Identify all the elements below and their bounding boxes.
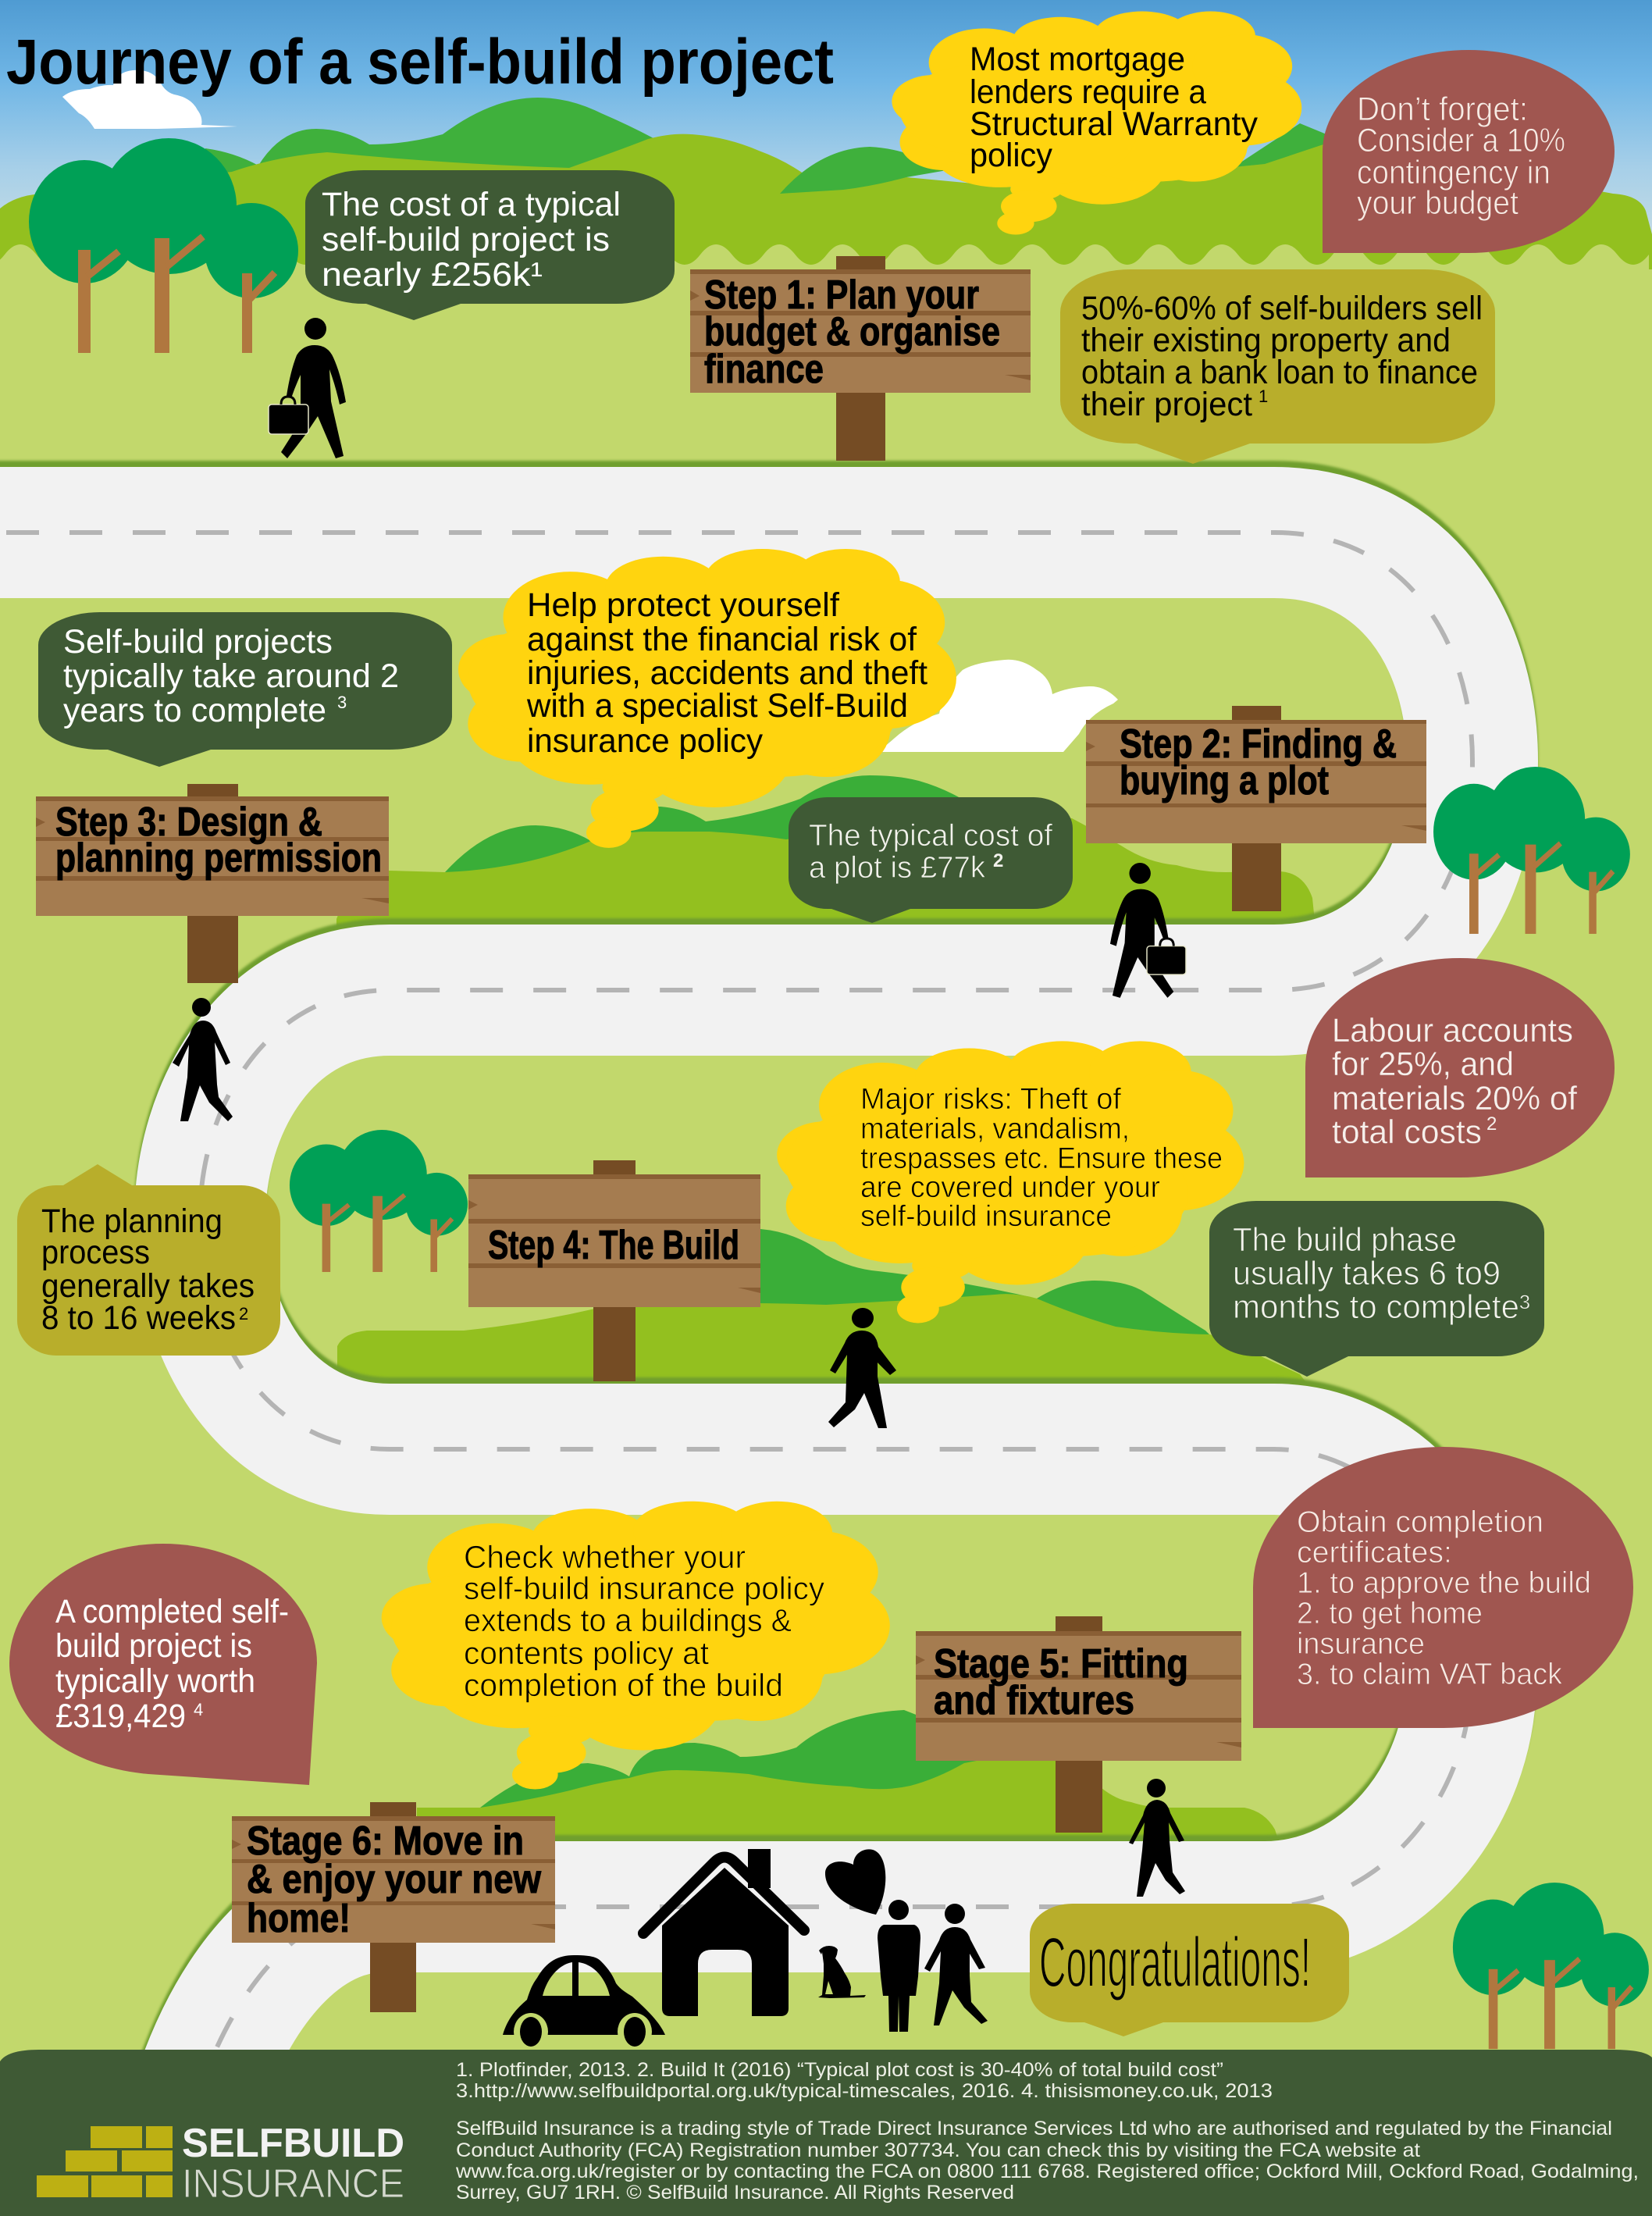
- sign text: [704, 273, 1000, 392]
- bubble text: years to complete: [63, 692, 326, 729]
- footer legal text: Surrey, GU7 1RH. © SelfBuild Insurance. All Rights Reserved: [456, 2182, 1014, 2204]
- icon: heart: [825, 1849, 885, 1915]
- cloud text: self-build insurance: [860, 1200, 1112, 1233]
- bubble text: 2: [1486, 1113, 1497, 1135]
- bubble text: 4: [194, 1700, 203, 1719]
- callout: self-builders finance: [1060, 269, 1495, 464]
- sign text: finance: [704, 347, 824, 392]
- footer legal text: SelfBuild Insurance is a trading style of Trade Direct Insurance Services Ltd who are authorised and regulated by the Financial: [456, 2118, 1612, 2139]
- bubble text: The build phase: [1233, 1221, 1457, 1259]
- bubble text: Consider a 10%: [1357, 122, 1565, 159]
- bubble text: usually takes 6 to9: [1233, 1255, 1501, 1292]
- cloud text: [860, 1083, 1223, 1233]
- callout: completed value: [9, 1544, 317, 1785]
- callout: structural warranty cloud: [892, 12, 1301, 235]
- bubble text: 2: [239, 1304, 248, 1324]
- cloud shape: [458, 549, 956, 848]
- callout: planning weeks: [17, 1164, 280, 1356]
- icon: walker with briefcase, step 2: [1110, 863, 1186, 998]
- icon: car: [503, 1955, 665, 2050]
- sign: step 2: [1086, 706, 1426, 911]
- far hills left: [187, 98, 703, 234]
- bubble text: total costs: [1332, 1113, 1482, 1151]
- callout: build phase: [1209, 1201, 1544, 1377]
- footer references: 3.http://www.selfbuildportal.org.uk/typical-timescales, 2016. 4. thisismoney.co.uk, 2013: [456, 2080, 1273, 2102]
- cloud text: self-build insurance policy: [464, 1570, 824, 1606]
- cloud text: [464, 1539, 824, 1703]
- footer legal text: Conduct Authority (FCA) Registration number 307734. You can check this by visiting the FCA website at: [456, 2139, 1420, 2161]
- sign text: [55, 800, 382, 881]
- bubble text: process: [41, 1234, 150, 1271]
- sign text: Stage 6: Move in: [247, 1819, 524, 1864]
- callout: cost of project: [305, 170, 675, 320]
- footer panel: [0, 2050, 1652, 2216]
- cloud text: Structural Warranty: [970, 105, 1258, 143]
- bubble shape: [9, 1544, 317, 1785]
- cloud text: contents policy at: [464, 1635, 710, 1671]
- cloud text: Major risks: Theft of: [860, 1083, 1121, 1116]
- sign text: Step 3: Design &: [55, 800, 322, 845]
- bubble text: for 25%, and: [1332, 1046, 1514, 1083]
- footer legal text: [455, 2118, 1639, 2204]
- bubble text: certificates:: [1297, 1536, 1452, 1569]
- cloud text: Help protect yourself: [527, 586, 840, 624]
- bubble text: 3: [337, 693, 347, 712]
- sign text: & enjoy your new: [247, 1857, 541, 1902]
- bubble text: a plot is £77k: [809, 851, 985, 885]
- bubble text: typically worth: [55, 1662, 255, 1700]
- bubble text: 1: [1259, 387, 1268, 406]
- trees: bottom right: [1453, 1883, 1649, 2049]
- cloud shape: [892, 12, 1301, 235]
- hills: zone 3 back: [480, 1710, 1038, 1827]
- sign text: [247, 1819, 541, 1941]
- far hill right part 2: [1234, 123, 1335, 167]
- bubble shape: [305, 170, 675, 320]
- bubble text: their project: [1081, 386, 1252, 423]
- icon: walker, stage 5: [1129, 1779, 1185, 1897]
- logo: wordmark: [182, 2121, 404, 2207]
- bubble text: Self-build projects: [63, 623, 333, 661]
- bubble text: [63, 623, 399, 729]
- bubble text: [1233, 1221, 1530, 1326]
- cloud text: Most mortgage: [970, 41, 1185, 78]
- bubble shape: [1209, 1201, 1544, 1377]
- icon: woman: [878, 1900, 920, 2032]
- hills: zone 3 front: [417, 1749, 1280, 1847]
- bubble text: nearly £256k¹: [322, 256, 543, 294]
- footer background: [0, 2050, 1652, 2216]
- bubble text: typically take around 2: [63, 657, 399, 695]
- bubble text: Labour accounts: [1332, 1012, 1573, 1049]
- bubble text: Congratulations!: [1039, 1924, 1311, 2002]
- footer references: 1. Plotfinder, 2013. 2. Build It (2016) “Typical plot cost is 30-40% of total build cost”: [456, 2059, 1223, 2081]
- sign: stage 6: [232, 1802, 555, 2012]
- bubble text: [1297, 1505, 1591, 1691]
- cloud text: injuries, accidents and theft: [527, 654, 927, 692]
- bubble text: materials 20% of: [1332, 1080, 1578, 1117]
- sign: step 3: [36, 784, 389, 983]
- footer references: [456, 2059, 1273, 2102]
- cloud text: insurance policy: [527, 722, 763, 760]
- sign text: Step 4: The Build: [488, 1223, 739, 1268]
- icon: house: [643, 1849, 804, 2016]
- icon: walker with briefcase, step 1: [269, 318, 346, 458]
- sign text: budget & organise: [704, 309, 1000, 354]
- icon: man: [924, 1904, 988, 2025]
- cloud text: Check whether your: [464, 1539, 746, 1575]
- far hill right part 1: [780, 147, 960, 194]
- bubble shape: [17, 1164, 280, 1356]
- bubble shape: [1305, 958, 1615, 1177]
- sign: step 4: [468, 1160, 760, 1381]
- bubble text: [1081, 290, 1483, 423]
- bubble text: [1332, 1012, 1578, 1151]
- icon: walker, step 4: [828, 1308, 896, 1428]
- bubble text: [809, 819, 1052, 885]
- bubble text: generally takes: [41, 1267, 255, 1305]
- logo: bricks: [37, 2126, 173, 2197]
- callout: major risks cloud: [777, 1041, 1244, 1323]
- bubble text: months to complete³: [1233, 1288, 1530, 1326]
- bubble text: build project is: [55, 1627, 252, 1665]
- cloud text: extends to a buildings &: [464, 1602, 792, 1638]
- bubble text: obtain a bank loan to finance: [1081, 354, 1478, 391]
- title: Journey of a self-build project: [6, 27, 834, 98]
- cloud text: are covered under your: [860, 1171, 1160, 1204]
- hills: zone 1 back: [445, 775, 1109, 890]
- trees: top left: [29, 138, 298, 353]
- sign text: Step 2: Finding &: [1120, 721, 1397, 767]
- bubble shape: [789, 797, 1073, 923]
- bubble text: 50%-60% of self-builders sell: [1081, 290, 1483, 327]
- bubble text: [1357, 91, 1565, 222]
- bubble text: [55, 1593, 289, 1735]
- cloud text: with a specialist Self-Build: [526, 687, 908, 725]
- bubble text: self-build project is: [322, 221, 610, 258]
- sign text: [934, 1641, 1188, 1723]
- bubble text: [41, 1202, 255, 1337]
- cloud text: lenders require a: [970, 73, 1206, 111]
- bubble text: Don’t forget:: [1357, 91, 1528, 128]
- bubble text: [322, 186, 621, 294]
- near hills: [0, 134, 1652, 269]
- callout: buildings and contents cloud: [382, 1502, 890, 1790]
- sign text: Step 1: Plan your: [704, 273, 979, 318]
- sign text: and fixtures: [934, 1678, 1134, 1723]
- callout: two years: [38, 612, 452, 767]
- cloud text: [526, 586, 927, 760]
- hills: zone 2 back: [703, 1229, 1218, 1343]
- sign text: planning permission: [55, 835, 382, 881]
- bubble text: £319,429: [55, 1698, 186, 1735]
- callout: labour and materials: [1305, 958, 1615, 1177]
- bubble text: insurance: [1297, 1627, 1425, 1661]
- sign text: home!: [247, 1896, 351, 1941]
- bubble text: The typical cost of: [809, 819, 1052, 853]
- callout: completion certificates: [1253, 1447, 1633, 1728]
- hills: zone 2 front: [337, 1294, 1312, 1390]
- cloud text: trespasses etc. Ensure these: [860, 1142, 1223, 1175]
- cloud text: materials, vandalism,: [860, 1113, 1130, 1145]
- callout: contingency: [1323, 50, 1615, 253]
- bubble text: their existing property and: [1081, 322, 1451, 359]
- road: winding path: [0, 526, 1472, 2139]
- sign: step 1: [690, 256, 1031, 461]
- bubble shape: [1323, 50, 1615, 253]
- cloud shape: [777, 1041, 1244, 1323]
- cloud text: completion of the build: [464, 1667, 783, 1703]
- bubble text: Obtain completion: [1297, 1505, 1543, 1539]
- hills: zone 1 front: [336, 812, 1316, 929]
- bubble shape: [1030, 1904, 1349, 2036]
- callout: insurance cloud: [458, 549, 956, 848]
- sky background: [0, 0, 1652, 269]
- cloud: top left: [62, 70, 237, 129]
- callout: plot cost: [789, 797, 1073, 923]
- cloud shape: [382, 1502, 890, 1790]
- cloud text: policy: [970, 137, 1052, 174]
- logo: wordmark: INSURANCE: [182, 2161, 404, 2207]
- icon: dog: [818, 1946, 866, 1998]
- bubble text: 8 to 16 weeks: [41, 1299, 236, 1337]
- sign text: [1120, 721, 1397, 803]
- bubble shape: [1253, 1447, 1633, 1728]
- bubble text: contingency in: [1357, 154, 1551, 191]
- bubble text: 2: [993, 850, 1003, 871]
- sign text: Stage 5: Fitting: [934, 1641, 1188, 1687]
- bubble text: 3. to claim VAT back: [1297, 1658, 1562, 1691]
- logo: wordmark: SELFBUILD: [182, 2121, 404, 2166]
- icon: walker, step 3: [173, 998, 233, 1121]
- bubble text: 2. to get home: [1297, 1597, 1483, 1630]
- bubble text: The planning: [41, 1202, 223, 1240]
- bubble text: A completed self-: [55, 1593, 289, 1630]
- bubble shape: [38, 612, 452, 767]
- sign: stage 5: [916, 1616, 1241, 1833]
- bubble text: 1. to approve the build: [1297, 1566, 1591, 1600]
- footer legal text: www.fca.org.uk/register or by contacting the FCA on 0800 111 6768. Registered office; Ockford Mill, Ockford Road, Godalming,: [455, 2161, 1639, 2182]
- cloud text: against the financial risk of: [527, 621, 917, 658]
- bubble text: The cost of a typical: [322, 186, 621, 223]
- cloud text: [970, 41, 1258, 174]
- sign text: buying a plot: [1120, 758, 1329, 803]
- trees: left of step 4: [290, 1130, 468, 1272]
- cloud: middle: [878, 660, 1118, 752]
- trees: right of step 2: [1433, 767, 1630, 934]
- bubble text: your budget: [1357, 184, 1518, 222]
- bubble shape: [1060, 269, 1495, 464]
- callout: congratulations: [1030, 1904, 1349, 2036]
